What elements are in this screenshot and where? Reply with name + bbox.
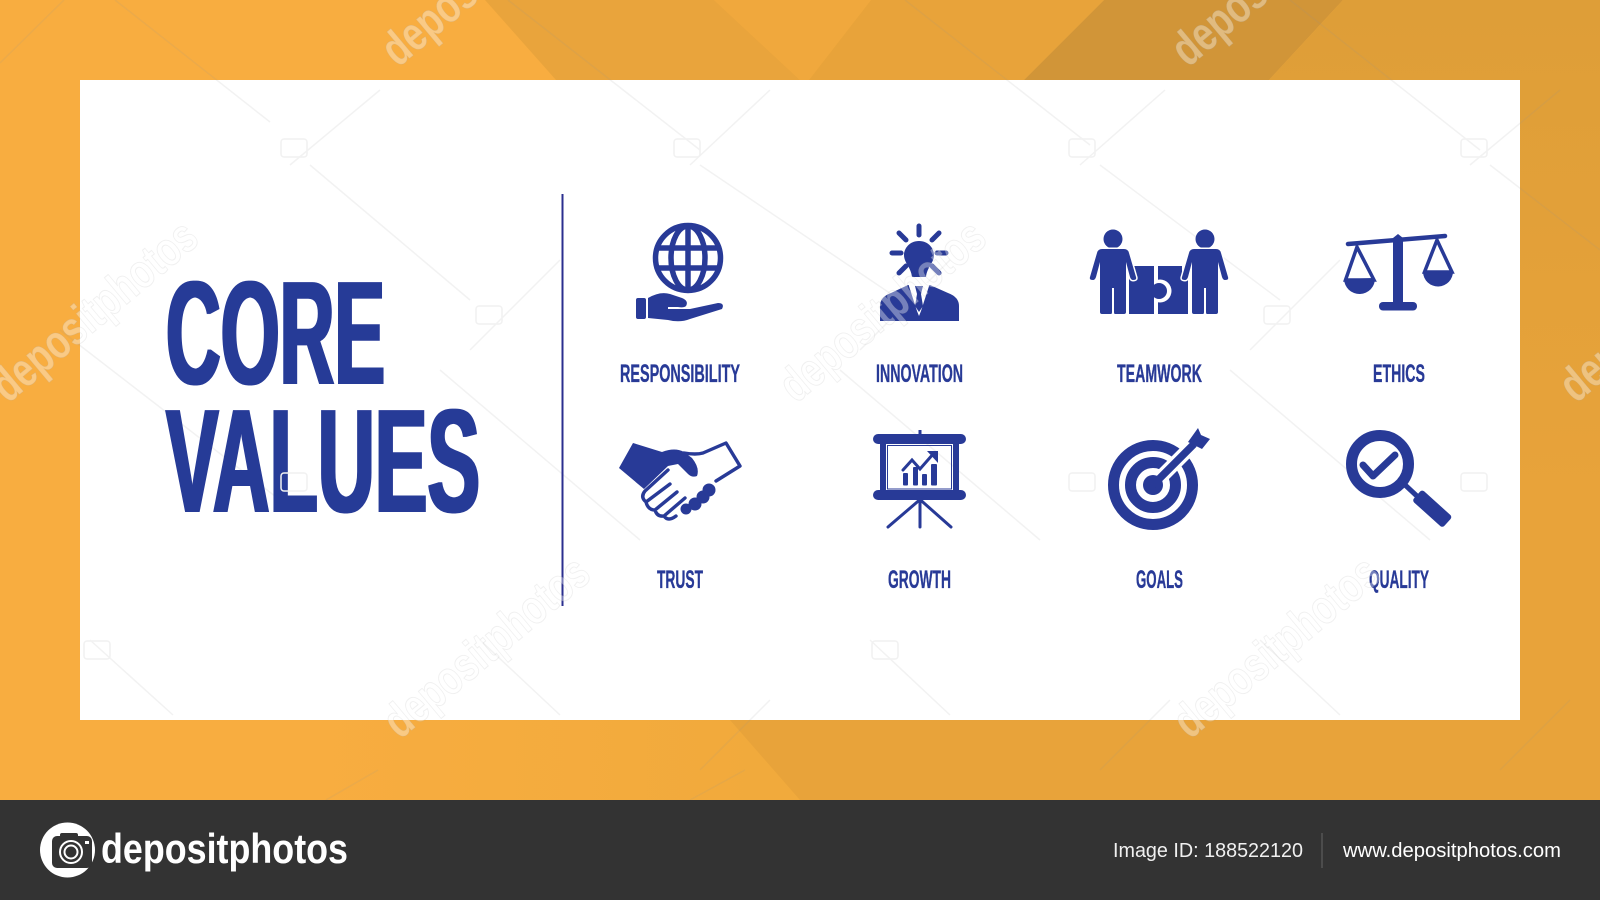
watermark camera marks <box>84 139 1487 659</box>
watermarks: depositphotos <box>1163 546 1390 748</box>
icon: camera badge <box>40 822 95 878</box>
divider line <box>562 194 564 606</box>
footer image id: Image ID: 188522120 <box>1113 840 1303 862</box>
title: core values: VALUES <box>166 379 480 544</box>
label: teamwork: TEAMWORK <box>1117 361 1202 388</box>
label: responsibility: RESPONSIBILITY <box>620 361 740 388</box>
icon: quality magnifier with check <box>1352 436 1452 528</box>
title: core values <box>166 251 480 544</box>
icon: goals target with arrow <box>1114 428 1210 524</box>
watermarks: depositphotos <box>769 210 996 412</box>
label: goals: GOALS <box>1136 567 1183 594</box>
white panel <box>80 80 1520 720</box>
label: trust: TRUST <box>657 567 703 594</box>
icon: globe in hand <box>636 225 723 321</box>
icon: growth presentation board <box>873 430 966 527</box>
icon: ethics scales <box>1344 234 1453 310</box>
footer logo <box>40 822 348 878</box>
icon: teamwork puzzle <box>1090 230 1228 314</box>
watermarks: depositphotos <box>373 546 600 748</box>
label: quality: QUALITY <box>1369 567 1429 594</box>
title: core values: CORE <box>166 251 385 416</box>
footer separator <box>1322 833 1323 868</box>
logo wordmark: depositphotos <box>101 825 348 872</box>
icon: trust handshake <box>619 443 740 519</box>
footer website: www.depositphotos.com <box>1342 840 1561 862</box>
label: growth: GROWTH <box>888 567 951 594</box>
label: innovation: INNOVATION <box>876 361 963 388</box>
label: ethics: ETHICS <box>1373 361 1425 388</box>
icon: innovation lightbulb head <box>880 226 959 321</box>
footer bar <box>0 800 1600 900</box>
